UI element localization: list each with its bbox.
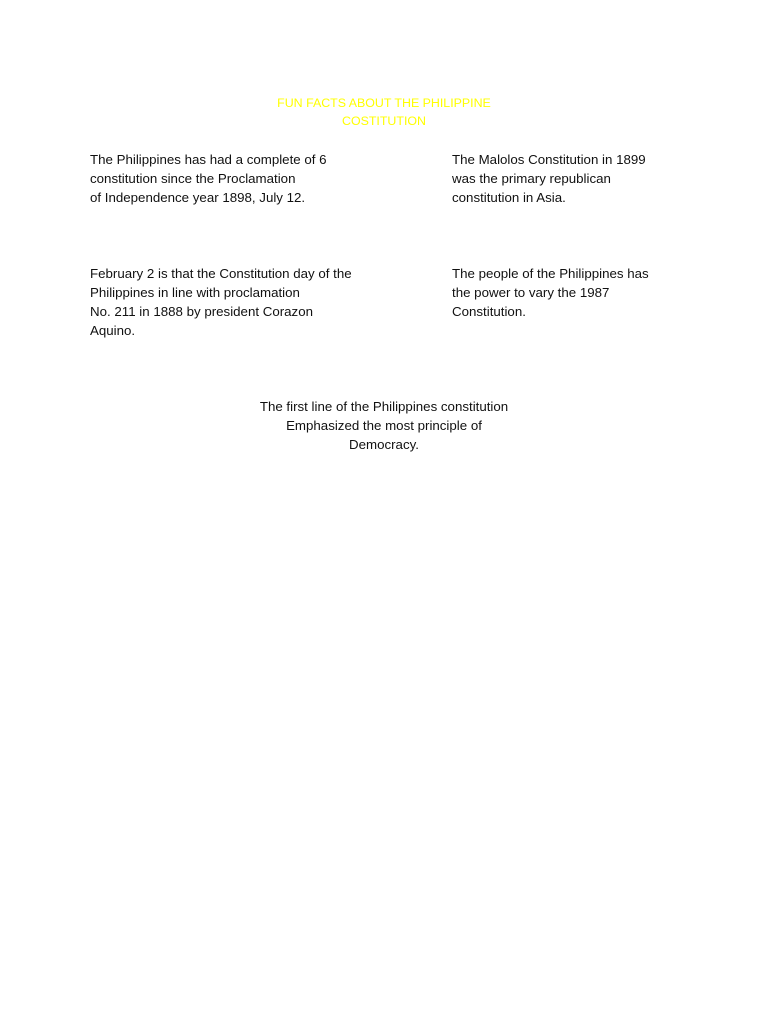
fact: Constitution day: No. 211 in 1888 by president Corazon [90,304,313,319]
fact: first line democracy: Emphasized the most principle of [286,418,482,433]
fact: power to vary [452,266,649,319]
fact: first line democracy: Democracy. [349,437,419,452]
fact: Constitution day: Aquino. [90,323,135,338]
fact: Malolos Constitution: constitution in Asia. [452,190,566,205]
fact: Constitution day: February 2 is that the Constitution day of the [90,266,352,281]
fact: six constitutions: of Independence year 1898, July 12. [90,190,305,205]
fact: Constitution day [90,266,352,338]
title: COSTITUTION [342,114,426,128]
fact: Malolos Constitution: was the primary republican [452,171,611,186]
fact: Constitution day: Philippines in line with proclamation [90,285,300,300]
title [277,96,491,128]
fact: six constitutions: constitution since the Proclamation [90,171,295,186]
fact: six constitutions: The Philippines has had a complete of 6 [90,152,327,167]
fact: Malolos Constitution: The Malolos Constitution in 1899 [452,152,646,167]
fact: first line democracy [260,399,508,452]
fact: power to vary: The people of the Philippines has [452,266,649,281]
fact: Malolos Constitution [452,152,646,205]
title: FUN FACTS ABOUT THE PHILIPPINE [277,96,491,110]
fact: first line democracy: The first line of the Philippines constitution [260,399,508,414]
fact: power to vary: Constitution. [452,304,526,319]
fact: six constitutions [90,152,327,205]
fact: power to vary: the power to vary the 1987 [452,285,609,300]
